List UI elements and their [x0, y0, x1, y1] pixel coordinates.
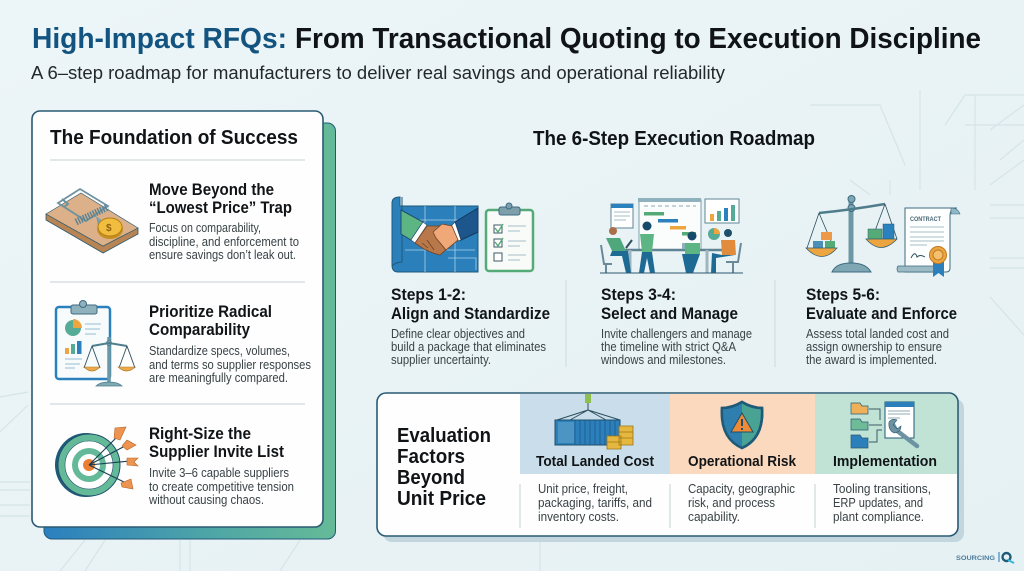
item: lowest price trap: discipline, and enforcement to — [149, 234, 299, 249]
item: lowest price trap: Move Beyond the — [149, 181, 274, 199]
icon: clipboard and scale — [56, 300, 135, 386]
item: radical comparability — [149, 303, 311, 385]
icon: shipping container and coins — [555, 394, 633, 449]
step 5-6 text: the award is implemented. — [806, 352, 937, 367]
logo: sourcing — [956, 552, 1014, 563]
implementation body: ERP updates, and — [833, 495, 923, 510]
title: High-Impact RFQs: — [32, 23, 287, 55]
item: lowest price trap: “Lowest Price” Trap — [149, 199, 292, 217]
title: From Transactional Quoting to Execution Discipline — [295, 23, 981, 55]
icon: team reviewing gantt chart — [600, 198, 743, 273]
total landed cost body: Unit price, freight, — [538, 481, 628, 496]
panel: foundation of success — [32, 111, 336, 539]
icon: balance scale and contract: CONTRACT — [910, 216, 941, 223]
step 5-6 text: assign ownership to ensure — [806, 339, 942, 354]
item: lowest price trap: Focus on comparability, — [149, 220, 261, 235]
step 3-4 text: Select and Manage — [601, 305, 738, 323]
step 3-4 text — [600, 286, 752, 367]
step 5-6 text: Assess total landed cost and — [806, 326, 949, 341]
item: supplier invite list: Supplier Invite List — [149, 443, 284, 461]
label: operational risk: Operational Risk — [688, 453, 797, 470]
implementation body: Tooling transitions, — [833, 481, 931, 496]
icon: shield with warning — [722, 402, 762, 448]
icon: target with arrows — [55, 427, 138, 497]
implementation body: plant compliance. — [833, 509, 924, 524]
icon: folders and wrench — [851, 402, 917, 448]
heading: roadmap: The 6-Step Execution Roadmap — [533, 127, 815, 150]
item: lowest price trap: ensure savings don’t leak out. — [149, 247, 296, 262]
panel: evaluation factors — [377, 393, 964, 542]
item: radical comparability: are meaningfully compared. — [149, 370, 288, 385]
icon: handshake on blueprint with checklist — [392, 197, 533, 272]
icon: balance scale and contract — [806, 196, 960, 277]
heading: foundation: The Foundation of Success — [50, 126, 298, 149]
item: supplier invite list — [148, 425, 294, 507]
total landed cost body: inventory costs. — [538, 509, 619, 524]
operational risk body — [688, 481, 796, 524]
step 5-6 text: Evaluate and Enforce — [806, 305, 957, 323]
step 1-2 text: supplier uncertainty. — [391, 352, 491, 367]
heading: evaluation factors — [397, 424, 491, 510]
heading: evaluation factors: Unit Price — [397, 487, 486, 510]
operational risk body: capability. — [688, 509, 740, 524]
step 3-4 text: the timeline with strict Q&A — [601, 339, 736, 354]
icon: mousetrap with coin: $ — [106, 223, 112, 234]
step 5-6 text: Steps 5-6: — [806, 286, 880, 304]
item: radical comparability: Comparability — [149, 321, 251, 339]
item: supplier invite list: to create competitive tension — [149, 479, 294, 494]
item: supplier invite list: without causing chaos. — [148, 492, 264, 507]
operational risk body: risk, and process — [688, 495, 775, 510]
total landed cost body: packaging, tariffs, and — [538, 495, 652, 510]
implementation body — [833, 481, 931, 524]
label: implementation: Implementation — [833, 453, 937, 470]
item: radical comparability: Prioritize Radical — [149, 303, 272, 321]
item: supplier invite list: Invite 3–6 capable suppliers — [149, 465, 289, 480]
item: radical comparability: and terms so supplier responses — [149, 357, 311, 372]
step 3-4 text: Steps 3-4: — [601, 286, 676, 304]
subtitle: A 6–step roadmap for manufacturers to deliver real savings and operational reliability — [31, 63, 725, 83]
heading: evaluation factors: Beyond — [397, 466, 465, 489]
heading: evaluation factors: Factors — [397, 445, 465, 468]
icon: mousetrap with coin — [46, 189, 138, 253]
step 3-4 text: Invite challengers and manage — [601, 326, 752, 341]
total landed cost body — [538, 481, 652, 524]
step 3-4 text: windows and milestones. — [600, 352, 726, 367]
item: supplier invite list: Right-Size the — [149, 425, 251, 443]
step 1-2 text: Align and Standardize — [391, 305, 550, 323]
heading: evaluation factors: Evaluation — [397, 424, 491, 447]
step 5-6 text — [806, 286, 957, 367]
step 1-2 text: Steps 1-2: — [391, 286, 466, 304]
step 1-2 text: build a package that eliminates — [391, 339, 546, 354]
item: lowest price trap — [149, 181, 299, 262]
item: radical comparability: Standardize specs, volumes, — [149, 343, 290, 358]
step 1-2 text — [391, 286, 550, 367]
logo: sourcing: SOURCING — [956, 555, 995, 562]
step 1-2 text: Define clear objectives and — [391, 326, 525, 341]
label: total landed cost: Total Landed Cost — [536, 453, 654, 470]
operational risk body: Capacity, geographic — [688, 481, 796, 496]
